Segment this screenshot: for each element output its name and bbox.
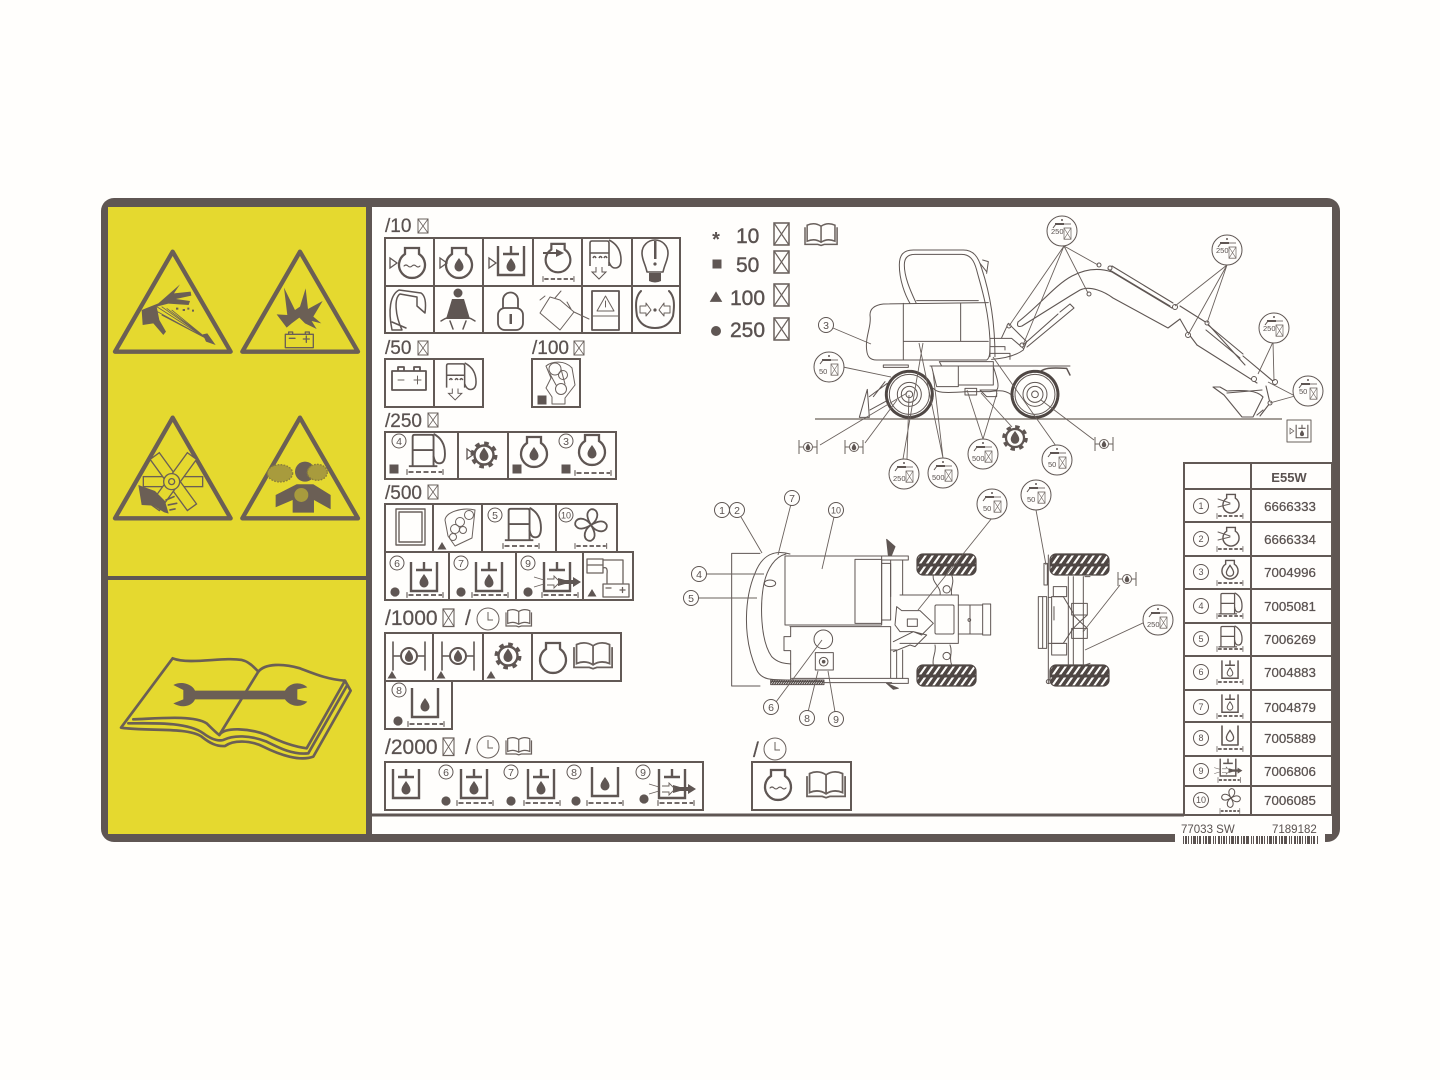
callout: grease 250 top boom [1047,216,1077,246]
callout: number 8: 8 [804,713,810,725]
heading: time based [753,738,786,762]
panel: 250 hour checks [385,432,616,479]
icon: air filter [543,244,574,282]
row 4: 7005081 [1264,599,1316,614]
row 9: 7006806 [1264,764,1316,779]
row 2: 2 [1198,534,1204,544]
heading: every 2000 hours [385,736,532,759]
callout: grease 50 top view: 50 [983,504,991,513]
heading: every 50 hours [385,338,428,359]
panel: 250 hour checks: 3 [563,436,569,448]
callout: number 2: 2 [734,505,740,517]
row 7: 7004879 [1264,700,1316,715]
panel: 500 hour checks: 9 [525,558,531,570]
callout: number 3: 3 [823,320,829,332]
callout: grease 50 top view [977,489,1007,519]
panel: 10 hour checks [385,238,680,333]
legend: service intervals: * [712,229,720,251]
icon: seat belt [441,288,475,329]
row 5: 5 [1198,634,1204,644]
icon: warning sign [592,291,619,330]
panel: 1000 hour checks [385,633,621,729]
row 2: 6666334 [1264,532,1316,547]
panel: time based check [752,762,851,810]
label background and frame [101,198,1340,848]
panel: 1000 hour checks: 8 [396,685,402,697]
icon: engine oil check [440,248,472,278]
row 3: 3 [1198,567,1204,577]
heading: every 1000 hours: / [465,607,471,630]
chart: excavator top view [684,480,1173,726]
callout: grease 250 axle: 250 [893,474,906,483]
callout: grease 250 dipper [1259,313,1289,343]
panel: 2000 hour checks [385,762,703,810]
icon: manual [805,224,837,245]
callout: grease 250 right view: 250 [1147,620,1160,629]
callout: grease 250 dipper: 250 [1263,324,1276,333]
icon: cab guard [390,290,426,330]
callout: grease 50 bucket [1293,376,1323,406]
panel: 2000 hour checks: 9 [640,767,646,779]
panel: 2000 hour checks: 8 [571,767,577,779]
icon: water separator [447,363,476,400]
panel: 2000 hour checks: 7 [508,767,514,779]
right view undercarriage [1050,554,1109,575]
heading: every 1000 hours: /1000 [385,607,438,630]
icon: battery [392,367,426,390]
panel: yellow warnings [108,207,366,834]
icon: coolant level check [390,248,425,278]
footer codes: 7189182 [1272,824,1317,836]
row 1 [1194,494,1316,518]
icon: engine belts [445,509,475,546]
heading: every 10 hours [385,216,428,237]
row 4: 4 [1198,601,1204,611]
callout: number 6 [764,700,778,714]
row 3: 7004996 [1264,565,1316,580]
callout: grease 500 frame: 500 [932,473,945,482]
row 4 [1194,593,1316,618]
panel: 500 hour checks: 7 [458,558,464,570]
callout: grease 50 frame: 50 [1048,460,1056,469]
row 9 [1194,759,1316,782]
callout: number 10 [828,502,844,518]
table: part numbers [1184,463,1332,815]
icon: hydraulic oil check [489,246,524,275]
row 3 [1194,560,1316,586]
callout: number 9 [828,712,844,726]
row 8 [1194,726,1316,752]
icon: hub oil middle [845,440,863,454]
row 6: 6 [1198,667,1204,677]
icon: engine belt [546,362,575,404]
panel: 100 hour check [532,359,580,407]
callout: number 7: 7 [789,493,795,505]
callout: grease 250 arm: 250 [1216,246,1229,255]
callout: number 8 [800,710,814,726]
footer rule [372,814,1184,816]
callout: number 7 [784,490,800,506]
icon: high pressure injection warning [115,252,231,352]
legend: service intervals: 250 [730,319,765,342]
icon: bucket on ground [540,291,589,330]
icon: rotating fan warning [115,418,231,518]
callout: grease 50 right view: 50 [1027,495,1035,504]
icon: hub oil left [799,440,817,454]
callout: number 4 [692,566,706,582]
panel: 500 hour checks: 5 [492,510,498,522]
panel: 500 hour checks: 10 [561,510,571,520]
footer codes: 77033 SW [1181,824,1235,836]
row 7 [1194,694,1316,718]
icon: manual with wrench [121,658,351,758]
barcode [1183,836,1319,844]
legend: service intervals: 100 [730,287,765,310]
icon: radiator [396,509,425,545]
icon: padlock [498,293,523,330]
machine upper structure [732,539,908,689]
callout: grease 50 bucket: 50 [1299,387,1307,396]
callout: number 5: 5 [688,593,694,605]
callout: number 5 [684,590,698,606]
legend: service intervals: 50 [736,254,759,277]
icon: water separator [590,240,621,279]
boom arm and bucket [1018,266,1274,417]
heading: every 500 hours: /500 [385,483,422,504]
heading: every 2000 hours: /2000 [385,736,438,759]
heading: every 250 hours: /250 [385,411,422,432]
callout: grease 250 axle [889,459,919,489]
leader lines top view [698,504,1145,712]
heading: every 100 hours: /100 [532,338,569,359]
heading: every 500 hours [385,483,438,504]
callout: grease 250 right view [1143,605,1173,635]
callout: number 3 [818,318,834,332]
callout: grease 50 blade [814,352,844,382]
callout: number 10: 10 [831,506,841,516]
callout: number 6: 6 [768,702,774,714]
heading: every 50 hours: /50 [385,338,411,359]
row 10: 10 [1196,795,1206,805]
row 5 [1194,626,1316,652]
row 8: 7005889 [1264,731,1316,746]
panel: 50 hour checks [385,359,483,407]
panel: 250 hour checks: 4 [396,436,402,448]
row 2 [1194,527,1316,552]
callout leader lines [820,246,1295,459]
row 7: 7 [1198,702,1204,712]
row 1: 1 [1198,501,1204,511]
legend: service intervals [710,223,837,342]
callout: grease 500 frame [928,458,958,488]
icon: oil level box [1287,420,1311,442]
heading: every 1000 hours [385,607,532,630]
callout: grease 50 blade: 50 [819,367,827,376]
callout: grease 500 axle [968,439,998,469]
callout: grease 50 frame [1042,445,1072,475]
icon: alternator and battery [587,559,629,597]
footer codes [1181,824,1317,836]
callout: number 4: 4 [696,569,702,581]
icon: toxic fumes warning [242,418,358,518]
legend: service intervals: 10 [736,225,759,248]
row 8: 8 [1198,733,1204,743]
heading: every 2000 hours: / [465,736,471,759]
callout: number 2 [730,502,744,518]
row 10 [1194,789,1316,814]
chart: excavator side view [799,216,1323,489]
table: part numbers: E55W [1271,470,1307,485]
panel: 2000 hour checks: 6 [443,767,449,779]
icon: hub oil right [1095,437,1113,451]
icon: gear oil [1004,427,1026,449]
machine body and wheels [859,250,1070,417]
row 10: 7006085 [1264,793,1316,808]
panel: 500 hour checks: 6 [394,558,400,570]
callout: grease 50 right view [1021,480,1051,510]
row 1: 6666333 [1264,499,1316,514]
icon: tyre pressure [636,291,674,328]
row 9: 9 [1198,766,1204,776]
heading: time based: / [753,739,759,762]
heading: every 10 hours: /10 [385,216,411,237]
callout: number 1: 1 [719,505,725,517]
icon: warning lamp [642,240,668,282]
undercarriage centre [893,575,991,665]
heading: every 250 hours [385,411,438,432]
callout: number 9: 9 [833,714,839,726]
panel: 500 hour checks [385,504,633,600]
icon: battery explosion warning [242,252,358,352]
callout: grease 500 axle: 500 [972,454,985,463]
callout: grease 250 arm [1212,235,1242,265]
icon: hub oil right view [1118,572,1136,586]
callout: grease 250 top boom: 250 [1051,227,1064,236]
row 6: 7004883 [1264,665,1316,680]
row 5: 7006269 [1264,632,1316,647]
row 6 [1194,660,1316,684]
callout: number 1 [714,502,730,518]
